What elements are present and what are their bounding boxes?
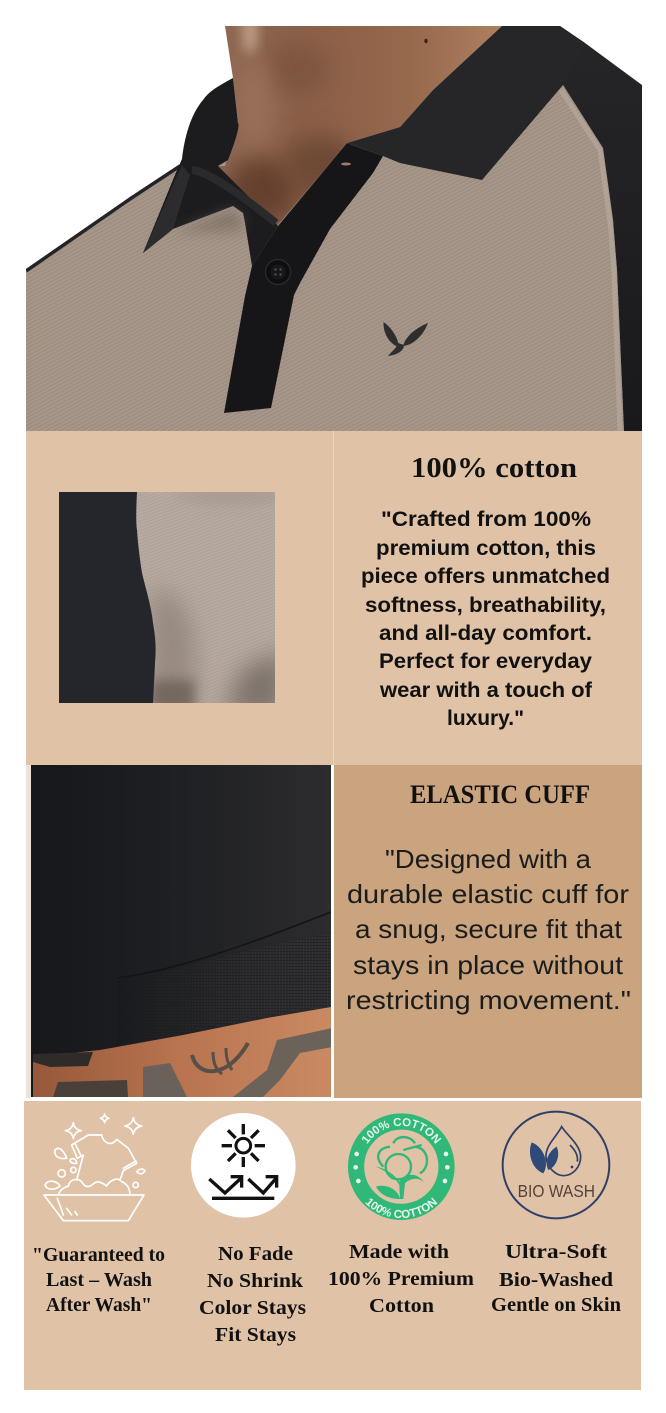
icon: sun fade-proof xyxy=(191,1113,296,1218)
text: cotton description: and all-day comfort. xyxy=(379,622,592,645)
left collar xyxy=(143,78,278,266)
text: cotton description: wear with a touch of xyxy=(379,679,593,702)
heading: 100% cotton: 100% cotton xyxy=(411,453,577,484)
placket xyxy=(224,143,383,413)
text: cotton description: "Crafted from 100% xyxy=(381,508,591,531)
hem seam xyxy=(117,912,331,978)
label: bio-washed: Ultra-Soft xyxy=(505,1241,607,1263)
text: cotton description: luxury." xyxy=(447,707,524,730)
text: cotton description: premium cotton, this xyxy=(376,537,596,560)
label: premium cotton: 100% Premium xyxy=(328,1268,474,1290)
label: no fade no shrink xyxy=(199,1243,306,1346)
label: wash guarantee: After Wash" xyxy=(46,1294,152,1316)
label: bio-washed xyxy=(491,1241,621,1316)
text: cuff description: a snug, secure fit that xyxy=(355,914,623,944)
tattoo xyxy=(33,1028,332,1097)
label: wash guarantee: Last – Wash xyxy=(46,1269,152,1291)
text: cuff description: durable elastic cuff for xyxy=(347,879,629,909)
label: premium cotton: Cotton xyxy=(369,1295,434,1317)
text: cuff description: "Designed with a xyxy=(385,844,592,874)
buttonhole xyxy=(341,162,351,166)
collar stand fold xyxy=(192,170,276,223)
label: no fade no shrink: No Fade xyxy=(218,1243,293,1265)
text: cotton description: softness, breathability, xyxy=(365,594,606,617)
left collar flap highlight xyxy=(143,165,190,253)
rib band fade xyxy=(117,952,244,1045)
right black sleeve xyxy=(560,26,642,431)
icon: bio wash badge: BIO WASH xyxy=(518,1181,595,1201)
taupe shirt body xyxy=(26,85,624,431)
photo: elastic cuff close-up xyxy=(26,765,332,1098)
icon: 100% cotton badge xyxy=(348,1113,455,1220)
rib band xyxy=(180,934,331,1034)
text: cuff description xyxy=(346,844,631,1015)
icon: bio wash badge xyxy=(503,1112,609,1218)
label: wash guarantee xyxy=(32,1244,165,1316)
panel: elastic cuff xyxy=(334,765,642,1098)
text: cuff description: restricting movement." xyxy=(346,985,631,1015)
icon: 100% cotton badge: 100% COTTON xyxy=(362,1118,442,1144)
text: cotton description: piece offers unmatched xyxy=(361,565,610,588)
label: premium cotton xyxy=(328,1241,474,1317)
text: cuff description: stays in place without xyxy=(353,950,624,980)
mole xyxy=(424,39,428,43)
icon: 100% cotton badge: 100% COTTON xyxy=(365,1198,438,1218)
left shoulder black strip xyxy=(26,166,180,271)
heading: ELASTIC CUFF: ELASTIC CUFF xyxy=(410,780,590,809)
label: no fade no shrink: Color Stays xyxy=(199,1297,306,1319)
photo: polo shirt collar and placket xyxy=(26,10,642,431)
button xyxy=(266,260,290,284)
neck skin xyxy=(218,26,502,226)
text: cotton description: Perfect for everyday xyxy=(379,650,592,673)
shadow under collar xyxy=(173,208,244,232)
label: wash guarantee: "Guaranteed to xyxy=(32,1244,165,1266)
logo: bird xyxy=(383,322,428,356)
label: no fade no shrink: No Shrink xyxy=(207,1270,304,1292)
light seam highlight xyxy=(561,90,620,431)
label: bio-washed: Gentle on Skin xyxy=(491,1294,621,1316)
arm skin xyxy=(33,1007,331,1097)
right collar xyxy=(347,26,585,180)
text: cotton description xyxy=(361,508,610,730)
label: no fade no shrink: Fit Stays xyxy=(215,1324,296,1346)
panel: 100% cotton background xyxy=(26,431,642,765)
icon: washing bowl xyxy=(44,1114,145,1221)
photo: fabric swatch xyxy=(59,492,275,703)
label: bio-washed: Bio-Washed xyxy=(499,1269,613,1291)
label: premium cotton: Made with xyxy=(349,1241,449,1263)
panel: feature icons xyxy=(24,1101,641,1390)
